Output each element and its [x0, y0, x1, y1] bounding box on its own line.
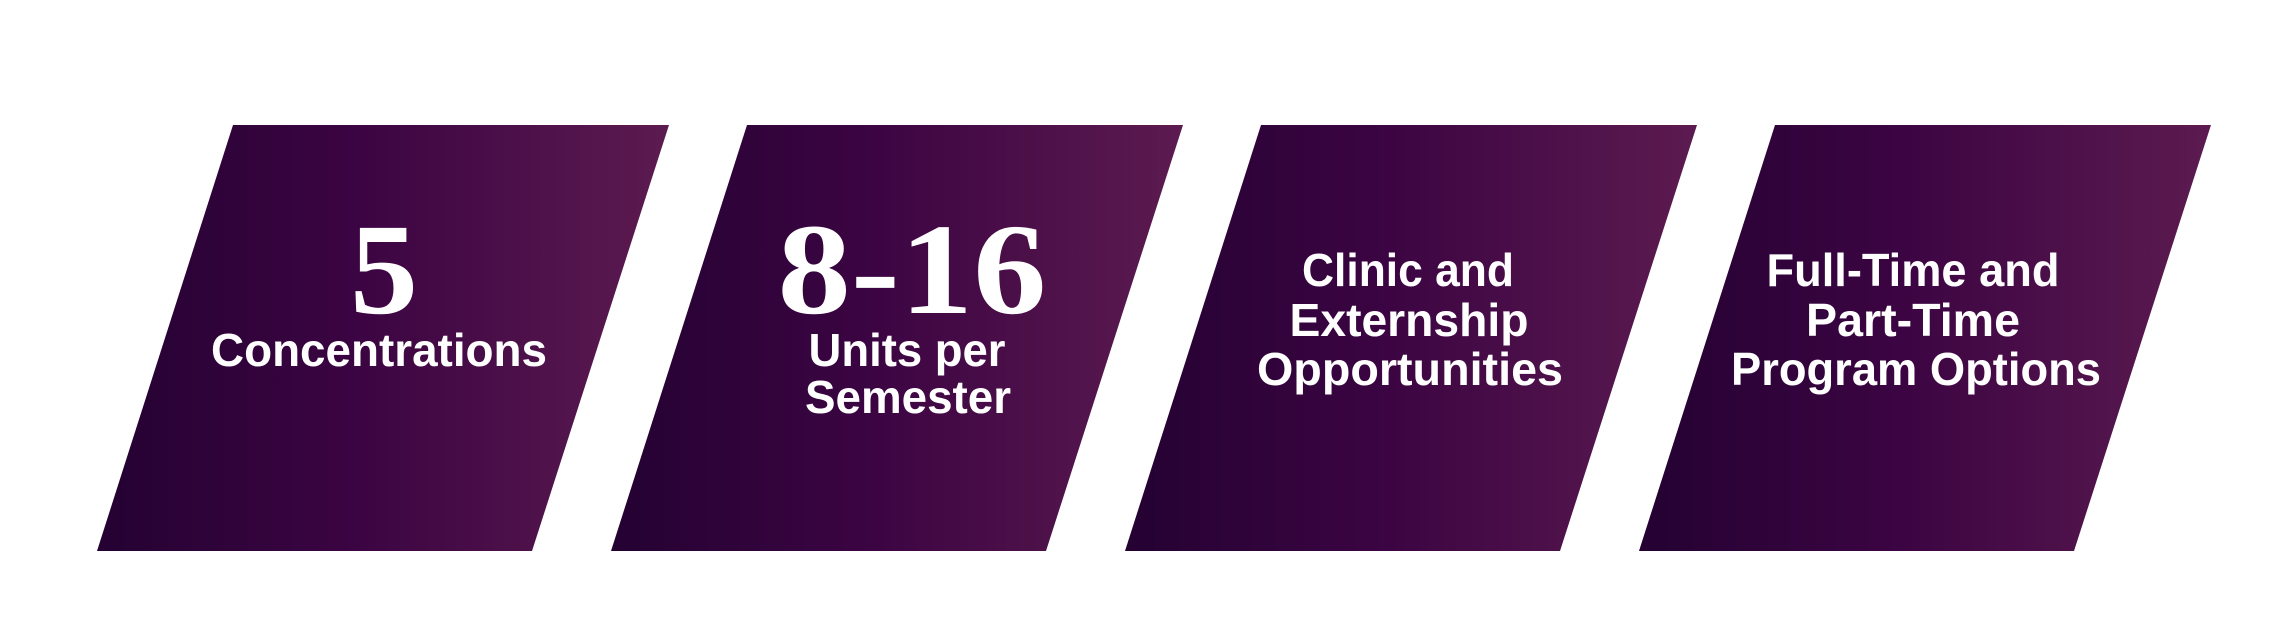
- number: 5: 5: [350, 198, 418, 342]
- panel: full-time and part-time: Part-Time: [1806, 294, 2020, 346]
- panel: full-time and part-time: Program Options: [1731, 343, 2101, 395]
- panel: units per semester: [611, 125, 1183, 551]
- label: Full-Time and Part-Time Program Options: Full-Time and: [1766, 244, 2060, 296]
- panel: clinic and externship: [1125, 125, 1697, 551]
- label: Concentrations: Concentrations: [211, 324, 547, 376]
- panel: clinic and externship: Opportunities: [1257, 343, 1563, 395]
- panel: clinic and externship: Externship: [1290, 294, 1528, 346]
- panel: full-time and part-time: [1639, 125, 2211, 551]
- panel: units per semester: Semester: [805, 371, 1011, 423]
- panel: concentrations: [97, 125, 669, 551]
- label: Clinic and Externship Opportunities: Clinic and: [1302, 244, 1514, 296]
- number: 8-16: 8-16: [778, 198, 1046, 342]
- label: Units per Semester: Units per: [808, 324, 1006, 376]
